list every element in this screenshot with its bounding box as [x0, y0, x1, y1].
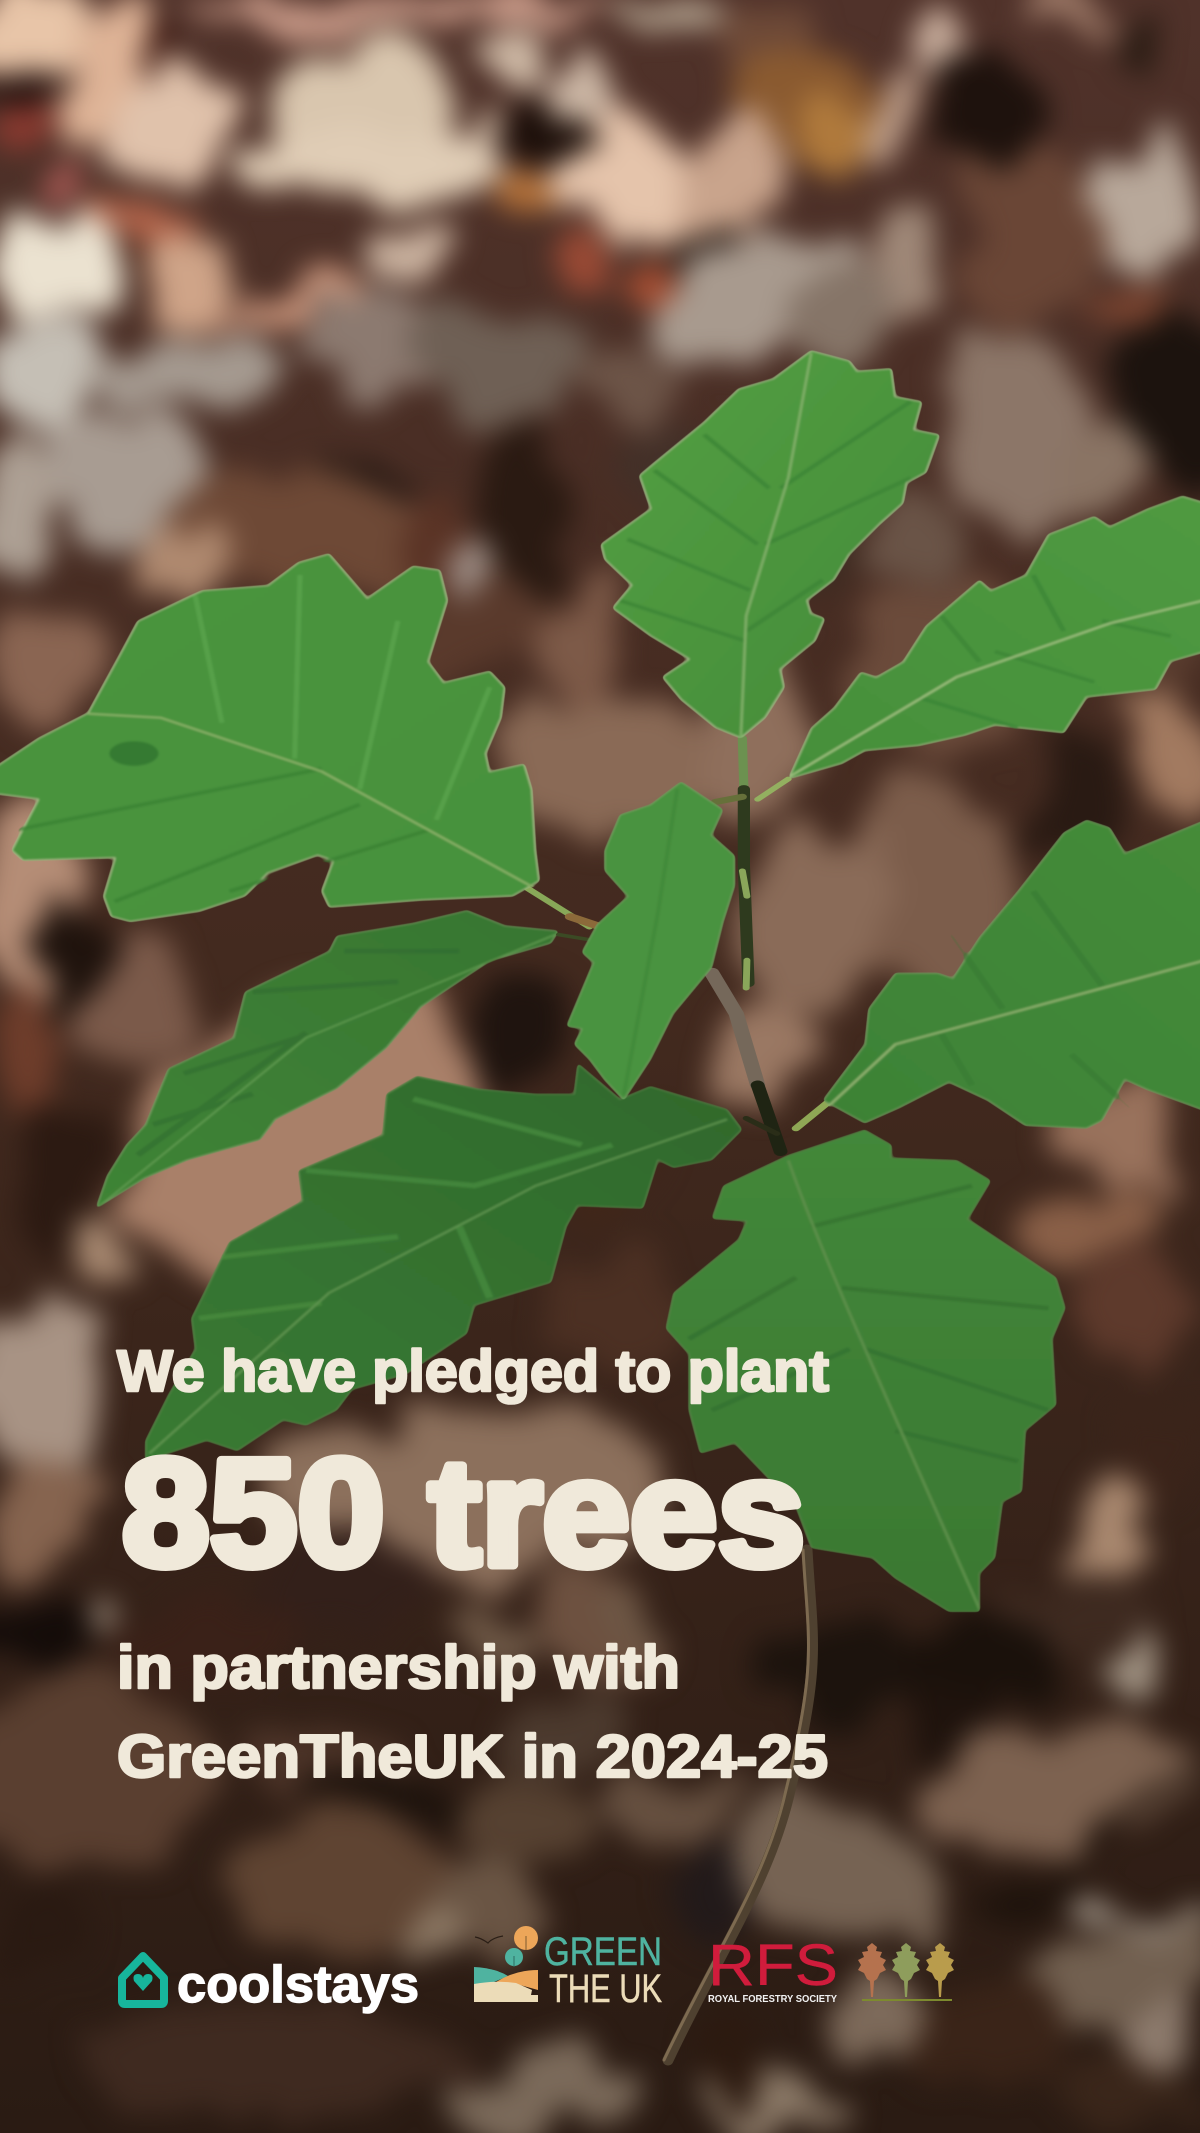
- text: partnership line: in partnership with: [117, 1634, 680, 1701]
- icon: teal house with heart: [122, 1956, 164, 2004]
- text: 850 trees: 850 trees: [122, 1428, 805, 1598]
- leaf: right lower, running off the edge: [823, 812, 1200, 1128]
- lower stem: [664, 1550, 813, 2060]
- background: lower leaf litter: [0, 1593, 1200, 2133]
- logo: Green The UK: [474, 1926, 662, 2011]
- text: GREEN: GREEN: [544, 1930, 662, 1974]
- leaf: large upper left: [0, 553, 540, 922]
- text: RFS: RFS: [708, 1933, 838, 1998]
- text: pledge intro: We have pledged to plant: [117, 1339, 829, 1404]
- text: THE UK: THE UK: [549, 1967, 662, 2011]
- text: Royal Forestry Society: ROYAL FORESTRY SOCIETY: [708, 1993, 837, 2005]
- background: top leaf litter: [0, 0, 1200, 605]
- leaf: upper right running off the edge: [788, 496, 1200, 779]
- leaf: lower centre-left: [145, 1063, 742, 1461]
- leaf: small centre: [566, 782, 735, 1100]
- logo: coolstays: [122, 1956, 419, 2014]
- oak seedling leaves (front group): [0, 350, 1200, 1128]
- text: GreenTheUK line: GreenTheUK in 2024-25: [117, 1723, 828, 1790]
- leaf: top centre: [601, 350, 940, 738]
- leaf: lower right large: [666, 1130, 1065, 1612]
- headline text block: [117, 1339, 829, 1790]
- leaf: lower-left slim: [96, 910, 559, 1209]
- text: coolstays wordmark: coolstays: [177, 1956, 419, 2014]
- oak seedling leaves (rear group): [96, 910, 1065, 1612]
- icon: landscape with trees and bird: [474, 1926, 538, 2002]
- main stem and leaf stalks: [528, 738, 830, 1151]
- icon: three oak leaves on a ground line: [858, 1943, 954, 2001]
- logo: Royal Forestry Society: [708, 1933, 954, 2005]
